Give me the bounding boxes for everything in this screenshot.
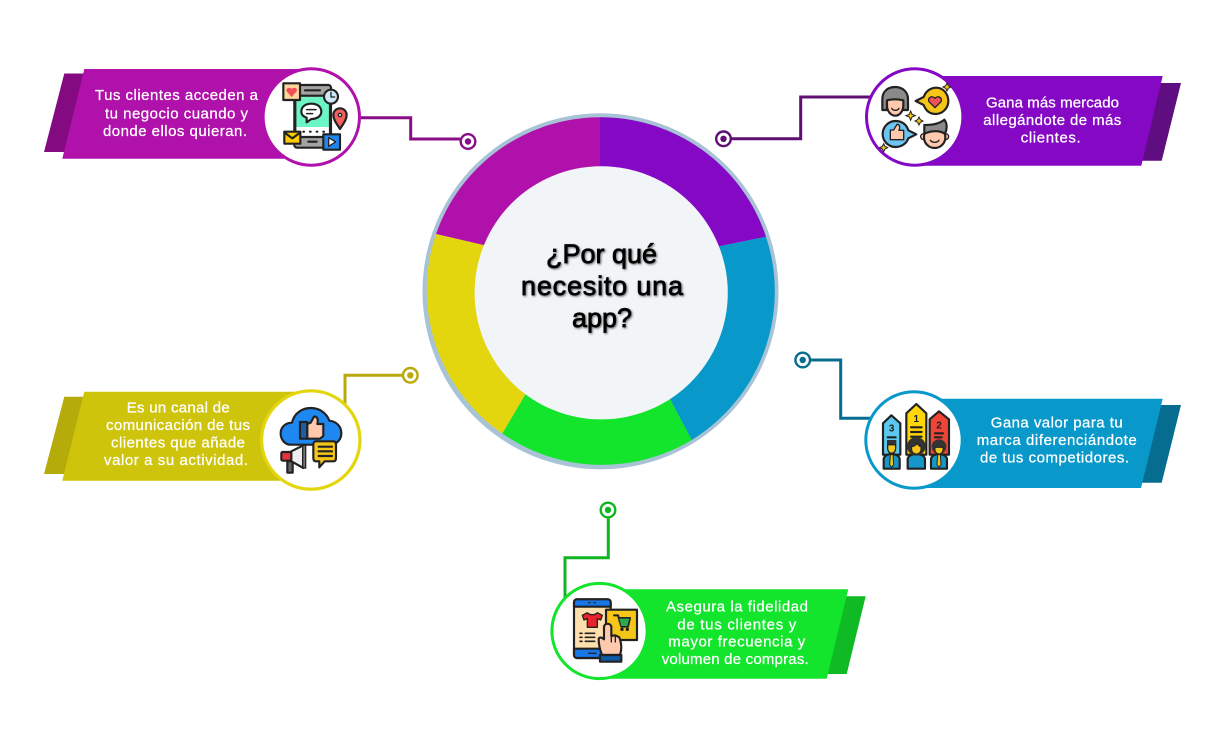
- text: purple: Gana más mercado: [986, 94, 1119, 111]
- text: magenta: [95, 87, 259, 140]
- title: [521, 239, 684, 333]
- donut chart: [422, 113, 778, 469]
- text: magenta: tu negocio cuando y: [105, 105, 248, 122]
- center disc: [475, 166, 728, 419]
- text: magenta: donde ellos quieran.: [103, 123, 247, 140]
- connector: magenta: [358, 118, 475, 149]
- ribbon: green: [600, 589, 866, 679]
- segment: magenta: [436, 117, 600, 292]
- icon: competitors ranking: 1: [914, 414, 920, 425]
- connector: purple: [716, 97, 870, 146]
- title: necesito una: [521, 271, 684, 301]
- text: magenta: Tus clientes acceden a: [95, 87, 259, 104]
- text: green: de tus clientes y: [677, 616, 797, 633]
- ribbon: yellow: [44, 392, 311, 481]
- text: green: [662, 599, 809, 668]
- icon: customers: [866, 69, 963, 165]
- title: ¿Por qué: [546, 239, 657, 269]
- connector: blue: [795, 353, 872, 418]
- text: yellow: comunicación de tus: [106, 417, 250, 434]
- text: yellow: [104, 400, 250, 469]
- panel: green: [552, 503, 866, 679]
- text: green: mayor frecuencia y: [668, 634, 806, 651]
- text: purple: clientes.: [1021, 129, 1081, 146]
- icon: competitors ranking: [866, 392, 962, 488]
- panel: purple: [716, 69, 1181, 166]
- ribbon: magenta: [44, 69, 311, 159]
- ribbon: blue: [914, 399, 1181, 488]
- panel: magenta: [44, 69, 475, 165]
- panel: blue: [795, 353, 1181, 488]
- icon: competitors ranking: 3: [889, 423, 895, 434]
- title: app?: [572, 303, 632, 333]
- text: purple: allegándote de más: [983, 112, 1121, 129]
- text: yellow: valor a su actividad.: [104, 452, 248, 469]
- text: blue: [977, 414, 1137, 466]
- text: blue: marca diferenciándote: [977, 432, 1137, 449]
- panel: yellow: [44, 368, 418, 489]
- segment: yellow: [427, 234, 600, 434]
- text: blue: de tus competidores.: [980, 449, 1129, 466]
- icon: mobile app: [263, 69, 359, 165]
- text: yellow: clientes que añade: [111, 435, 245, 452]
- text: green: volumen de compras.: [662, 651, 809, 668]
- segment: blue: [600, 237, 775, 440]
- text: purple: [983, 94, 1121, 146]
- segment: green: [502, 292, 692, 465]
- text: blue: Gana valor para tu: [991, 414, 1123, 431]
- ribbon: purple: [915, 76, 1181, 166]
- text: green: Asegura la fidelidad: [666, 599, 808, 616]
- text: yellow: Es un canal de: [127, 400, 230, 417]
- icon: competitors ranking: 2: [936, 421, 942, 432]
- icon: cloud feedback: [262, 391, 360, 489]
- icon: mobile shopping: [552, 583, 647, 679]
- connector: yellow: [345, 368, 418, 408]
- segment: purple: [600, 117, 766, 292]
- connector: green: [565, 503, 615, 600]
